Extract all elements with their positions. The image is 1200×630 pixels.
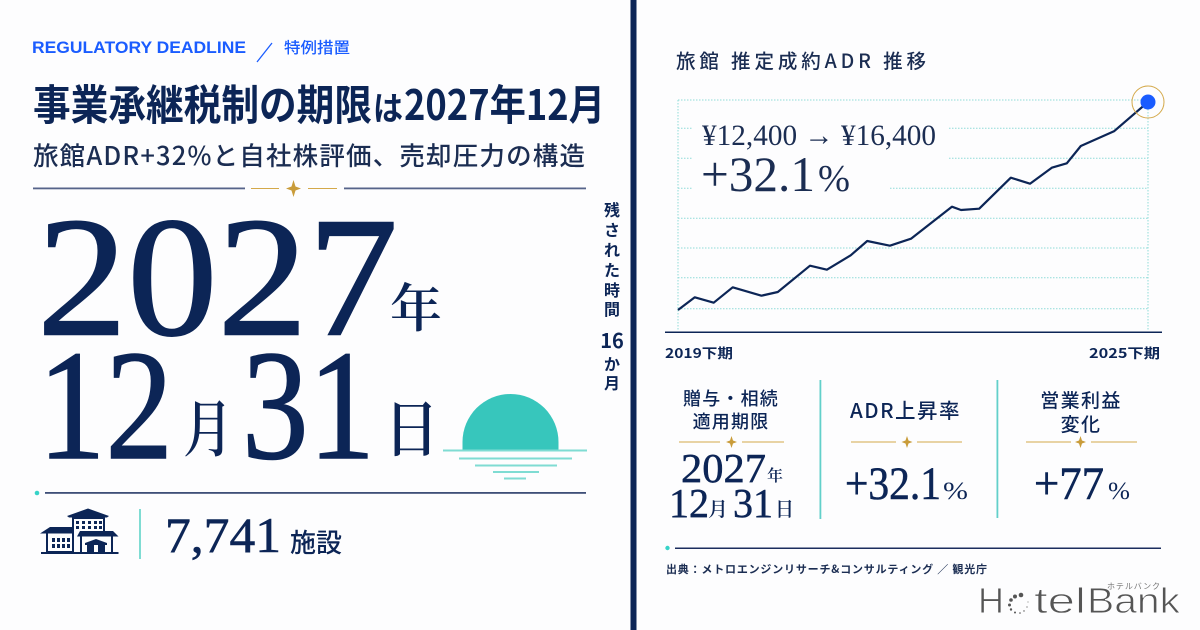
stat: facilities: 7,741 — [165, 507, 281, 563]
big date: 12月31日: 月 — [183, 380, 233, 469]
chart callout: ¥12,400 → ¥16,400 — [702, 119, 936, 152]
panel: stat ADR: +32.1 — [845, 458, 941, 510]
panel: stat deadline: 日 — [775, 493, 794, 522]
eyebrow label: 特例措置 — [284, 36, 350, 58]
logo: HotelBank: ホテルバンク — [1107, 581, 1160, 592]
logo: HotelBank — [978, 580, 1181, 621]
panel: stat deadline — [669, 385, 794, 526]
icon: ryokan building — [40, 508, 118, 554]
panel: stat operating profit: +77 — [1034, 458, 1104, 510]
x axis labels — [665, 342, 1160, 362]
rule with teal dot — [35, 491, 586, 495]
vertical label: time remaining: さ — [604, 217, 620, 241]
line chart — [665, 86, 1164, 333]
title — [33, 72, 605, 133]
eyebrow label: REGULATORY DEADLINE — [32, 38, 246, 57]
panel: stat operating profit — [1026, 386, 1137, 510]
vertical label: time remaining: か — [604, 351, 620, 375]
panel: stat deadline: 12 — [669, 480, 709, 526]
icon: sun over water — [443, 394, 587, 480]
vertical label: time remaining: 時 — [604, 277, 620, 301]
subtitle: 旅館ADR+32%と自社株評価、売却圧力の構造 — [33, 136, 585, 173]
chart callout: +32.1 — [701, 146, 815, 202]
big date: 12月31日 — [38, 318, 439, 492]
panel: stat operating profit: 営業利益 — [1040, 386, 1122, 413]
vertical label: time remaining: 月 — [604, 370, 620, 394]
vertical label: time remaining: 間 — [604, 296, 620, 320]
stat divider — [820, 380, 821, 519]
logo: HotelBank: tel — [1034, 580, 1086, 621]
panel: stat deadline: 31 — [733, 480, 773, 526]
stat divider — [996, 380, 998, 518]
facility count divider — [139, 509, 141, 559]
panel: stat deadline: 月 — [708, 493, 728, 522]
big date: 12月31日: 日 — [384, 380, 439, 469]
panel: stat deadline: 2027 — [681, 445, 766, 491]
panel: stat deadline: 年 — [767, 463, 783, 486]
panel: stat deadline: 贈与・相続 — [683, 385, 779, 411]
vertical label: time remaining: 16 — [600, 325, 624, 354]
x axis labels: 2019下期 — [665, 342, 733, 362]
vertical label: time remaining: た — [604, 257, 620, 281]
vertical label: time remaining: 残 — [604, 197, 620, 221]
centre divider — [630, 0, 636, 630]
big date: 12月31日: 31 — [242, 318, 375, 492]
title: は — [373, 82, 403, 130]
panel: stat ADR: ADR上昇率 — [850, 394, 961, 424]
eyebrow label — [32, 36, 350, 62]
big date: 2027年: 年 — [390, 267, 442, 342]
panel: stat ADR: % — [943, 478, 968, 505]
big date: 2027年: 2027 — [37, 182, 398, 372]
panel: stat operating profit: 変化 — [1061, 410, 1101, 437]
chart title: 旅館 推定成約ADR 推移 — [676, 45, 926, 74]
chart callout — [701, 119, 936, 202]
big date: 12月31日: 12 — [38, 318, 173, 492]
panel: stat operating profit: % — [1108, 478, 1130, 505]
logo: HotelBank: H — [978, 580, 1004, 621]
title: 事業承継税制の期限 — [33, 72, 372, 133]
stat: facilities: 施設 — [290, 523, 342, 560]
title: 2027年12月 — [404, 72, 605, 133]
chart callout: % — [818, 158, 850, 200]
panel: stat ADR — [845, 394, 968, 510]
logo: HotelBank: Bank — [1087, 580, 1181, 621]
vertical label: time remaining: れ — [604, 237, 620, 261]
panel: stat deadline: 適用期限 — [693, 408, 769, 434]
rule with teal dot — [665, 546, 1161, 550]
x axis labels: 2025下期 — [1089, 342, 1160, 362]
ornament divider — [33, 180, 586, 197]
source note: 出典：メトロエンジンリサーチ&コンサルティング ／ 観光庁 — [666, 561, 987, 577]
vertical label: time remaining — [600, 197, 624, 394]
stat: facilities — [165, 507, 342, 563]
